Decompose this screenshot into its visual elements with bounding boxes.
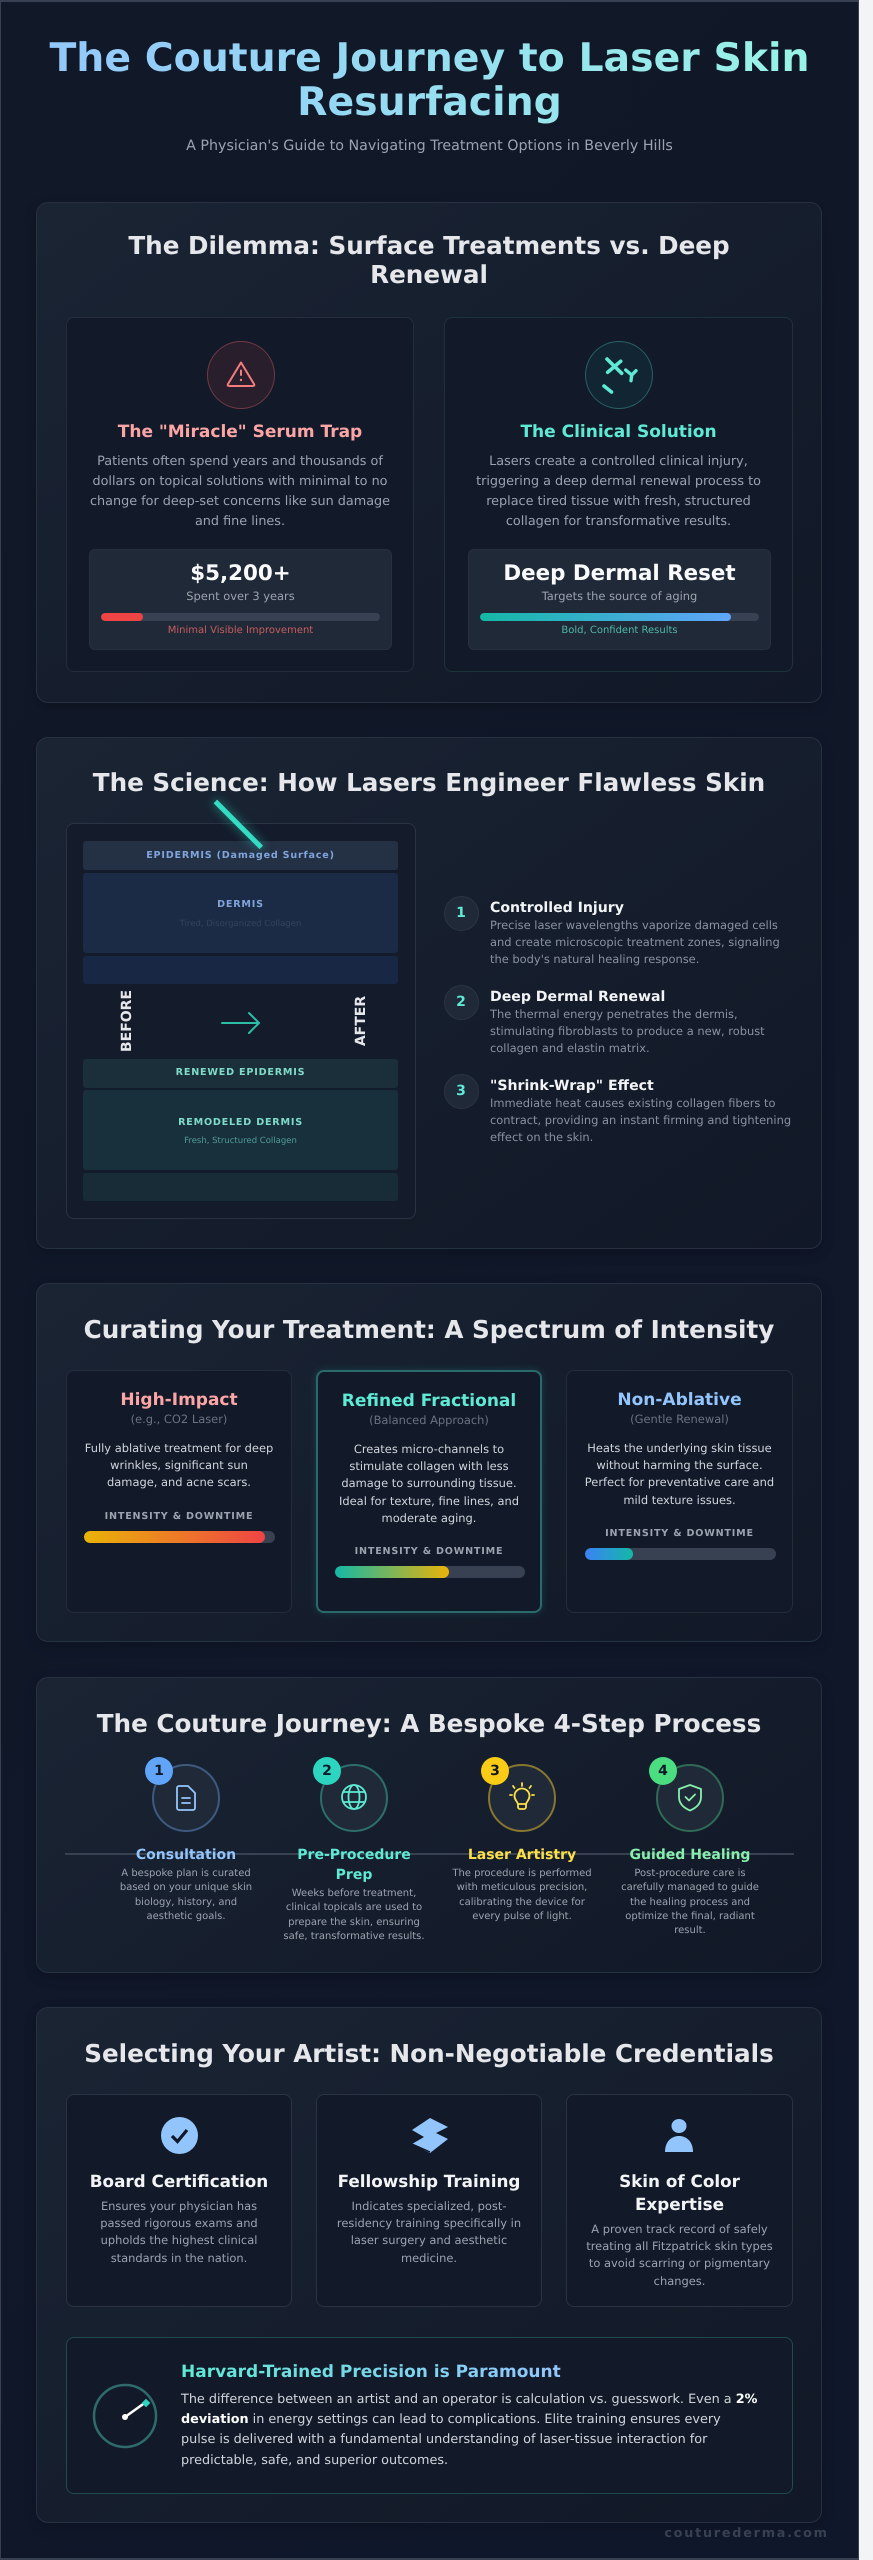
credential text xyxy=(100,2199,258,2265)
card: board certification xyxy=(66,2094,292,2307)
intensity meter xyxy=(334,1566,524,1578)
option subtitle: (Gentle Renewal) xyxy=(630,1412,729,1426)
icon: light bulb xyxy=(488,1764,556,1832)
credential text: medicine. xyxy=(401,2251,457,2265)
option text: Creates micro-channels to xyxy=(354,1442,504,1456)
meter label: INTENSITY & DOWNTIME xyxy=(105,1511,253,1522)
icon: precision gauge xyxy=(92,2384,158,2448)
step text: carefully managed to guide xyxy=(621,1882,759,1893)
step text: clinical topicals are used to xyxy=(286,1902,422,1913)
icon: globe xyxy=(320,1764,388,1832)
step: guided healing xyxy=(621,1757,759,1936)
card text: triggering a deep dermal renewal process to xyxy=(476,474,761,489)
callout title: Harvard-Trained Precision is Paramount xyxy=(181,2362,561,2382)
step text: Weeks before treatment, xyxy=(292,1888,416,1899)
card text: Lasers create a controlled clinical injury, xyxy=(489,454,748,469)
step number xyxy=(444,1074,478,1109)
card: fellowship xyxy=(316,2094,542,2307)
credential text: laser surgery and aesthetic xyxy=(351,2233,507,2247)
icon: check badge xyxy=(161,2117,198,2154)
step number xyxy=(444,985,478,1020)
step text: every pulse of light. xyxy=(472,1911,572,1922)
step badge xyxy=(649,1757,677,1785)
step text: based on your unique skin xyxy=(120,1882,252,1893)
credential text: treating all Fitzpatrick skin types xyxy=(586,2239,773,2253)
icon: document xyxy=(152,1764,220,1832)
icon: person xyxy=(665,2119,693,2152)
step text: The thermal energy penetrates the dermis, xyxy=(490,1006,738,1020)
step badge xyxy=(145,1757,173,1785)
step text: the body's natural healing response. xyxy=(490,952,699,966)
step title: Consultation xyxy=(136,1846,236,1862)
step text: aesthetic goals. xyxy=(146,1911,226,1922)
timeline line xyxy=(65,1853,794,1855)
watermark: couturederma.com xyxy=(664,2526,829,2541)
step badge: 2 xyxy=(322,1763,332,1779)
card text: collagen for transformative results. xyxy=(506,514,731,529)
credential title: Expertise xyxy=(635,2194,724,2214)
step text: with meticulous precision, xyxy=(457,1882,587,1893)
stat caption: Spent over 3 years xyxy=(186,589,295,603)
credential text: passed rigorous exams and xyxy=(100,2216,258,2230)
step: laser artistry xyxy=(452,1757,592,1922)
card: serum trap xyxy=(66,317,414,672)
heading: science: The Science: How Lasers Engineer Flawless Skin xyxy=(93,768,765,796)
step: pre-procedure xyxy=(283,1757,425,1942)
option text: moderate aging. xyxy=(382,1511,476,1525)
step text: Post-procedure care is xyxy=(634,1868,746,1879)
step 1 xyxy=(444,896,780,966)
callout text: deviation in energy settings can lead to complications. Elite training ensures every xyxy=(181,2412,721,2427)
label: dermis: DERMIS xyxy=(217,899,264,910)
option title: Refined Fractional xyxy=(342,1390,516,1410)
card: non-ablative xyxy=(566,1370,793,1613)
heading: dilemma: Renewal xyxy=(370,260,488,289)
credential text: upholds the highest clinical xyxy=(101,2233,257,2247)
step number: 3 xyxy=(456,1083,466,1099)
card text: dollars on topical solutions with minimal to no xyxy=(92,474,388,489)
step text: The procedure is performed xyxy=(452,1868,592,1879)
bar: bold results xyxy=(480,613,759,621)
step title xyxy=(297,1846,411,1882)
option subtitle: (e.g., CO2 Laser) xyxy=(131,1412,227,1426)
panel: dilemma xyxy=(36,202,822,703)
heading: journey: The Couture Journey: A Bespoke 4-Step Process xyxy=(97,1708,761,1738)
layer: epidermis before xyxy=(83,841,398,870)
option text: Ideal for texture, fine lines, and xyxy=(339,1494,519,1508)
bar caption: Bold, Confident Results xyxy=(561,625,678,636)
stat caption: Targets the source of aging xyxy=(542,589,697,603)
step text: Immediate heat causes existing collagen fibers to xyxy=(490,1096,776,1110)
stat box xyxy=(89,549,392,650)
option text: damage, and acne scars. xyxy=(107,1475,251,1489)
option text: wrinkles, significant sun xyxy=(110,1458,248,1472)
card text: replace tired tissue with fresh, structured xyxy=(486,494,751,509)
step title: Laser Artistry xyxy=(468,1846,576,1862)
option text xyxy=(339,1442,519,1525)
layer: subcutis after xyxy=(83,1173,398,1201)
step 2 xyxy=(444,985,765,1055)
credential text: A proven track record of safely xyxy=(591,2222,768,2236)
option title: High-Impact xyxy=(120,1390,238,1410)
card title: The "Miracle" Serum Trap xyxy=(118,422,362,442)
credential title xyxy=(619,2170,740,2214)
label: tired collagen: Tired, Disorganized Collagen xyxy=(180,919,301,929)
step badge: 3 xyxy=(490,1763,500,1779)
step number: 1 xyxy=(456,905,466,921)
card text xyxy=(476,454,761,529)
option text: stimulate collagen with less xyxy=(349,1459,509,1473)
diagram panel xyxy=(66,823,416,1219)
step title: Pre-Procedure xyxy=(297,1846,411,1862)
step text: Precise laser wavelengths vaporize damaged cells xyxy=(490,918,778,932)
step text xyxy=(452,1868,592,1922)
layer: epidermis after xyxy=(83,1059,398,1088)
bar caption: Minimal Visible Improvement xyxy=(168,625,313,636)
step title: Controlled Injury xyxy=(490,900,624,916)
step text: stimulating fibroblasts to produce a new, robust xyxy=(490,1024,765,1038)
callout text xyxy=(180,2392,758,2468)
label: before: BEFORE xyxy=(118,990,134,1052)
step text: calibrating the device for xyxy=(459,1897,585,1908)
option text xyxy=(85,1441,273,1489)
panel: science xyxy=(36,737,822,1249)
option text: without harming the surface. xyxy=(596,1458,763,1472)
label: remodeled dermis: REMODELED DERMIS xyxy=(178,1117,303,1128)
step: consultation xyxy=(120,1757,252,1922)
step text: collagen and elastin matrix. xyxy=(490,1041,650,1055)
credential title: Fellowship Training xyxy=(338,2170,520,2190)
card text xyxy=(90,454,390,529)
bar: minimal improvement xyxy=(101,613,380,621)
step text xyxy=(120,1868,252,1922)
credential text: to avoid scarring or pigmentary xyxy=(589,2256,770,2270)
step title: Guided Healing xyxy=(630,1846,750,1862)
step text: the healing process and xyxy=(630,1897,750,1908)
step text xyxy=(490,1006,765,1055)
step title: Prep xyxy=(336,1866,372,1882)
meter label: INTENSITY & DOWNTIME xyxy=(355,1546,503,1557)
heading: dilemma xyxy=(128,231,730,289)
callout text: predictable, safe, and superior outcomes. xyxy=(181,2453,448,2468)
option text: Heats the underlying skin tissue xyxy=(587,1441,772,1455)
option text: Perfect for preventative care and xyxy=(585,1475,774,1489)
heading: dilemma: The Dilemma: Surface Treatments vs. Deep xyxy=(128,231,730,260)
label: epidermis: EPIDERMIS (Damaged Surface) xyxy=(146,850,335,861)
panel: journey xyxy=(36,1677,822,1973)
card text: change for deep-set concerns like sun damage xyxy=(90,494,390,509)
step text: result. xyxy=(674,1925,706,1936)
icon: dna fragments xyxy=(585,341,653,409)
credential text: residency training specifically in xyxy=(337,2216,521,2230)
option text: Fully ablative treatment for deep xyxy=(85,1441,273,1455)
card: high-impact xyxy=(66,1370,292,1613)
laser beam xyxy=(214,799,263,848)
intensity meter xyxy=(585,1548,776,1560)
stat value: Deep Dermal Reset xyxy=(503,561,736,586)
step text xyxy=(490,1096,791,1144)
title: Resurfacing xyxy=(297,78,562,124)
credential title: Skin of Color xyxy=(619,2170,740,2190)
label: renewed epidermis: RENEWED EPIDERMIS xyxy=(176,1067,305,1078)
icon: shield xyxy=(656,1764,724,1832)
heading: credentials: Selecting Your Artist: Non-Negotiable Credentials xyxy=(84,2038,774,2068)
option text xyxy=(585,1441,774,1507)
credential title: Board Certification xyxy=(90,2170,268,2190)
layer: subcutis before xyxy=(83,956,398,984)
credential text xyxy=(337,2199,521,2265)
step 3 xyxy=(444,1074,791,1144)
subtitle: A Physician's Guide to Navigating Treatment Options in Beverly Hills xyxy=(186,138,673,154)
card text: Patients often spend years and thousands of xyxy=(97,454,383,469)
callout text: pulse is delivered with a fundamental understanding of laser-tissue interaction for xyxy=(181,2432,707,2447)
option text: mild texture issues. xyxy=(623,1493,736,1507)
panel: spectrum xyxy=(36,1283,822,1642)
option title: Non-Ablative xyxy=(617,1390,742,1410)
card text: and fine lines. xyxy=(195,514,285,529)
step badge: 1 xyxy=(154,1763,164,1779)
step text: optimize the final, radiant xyxy=(625,1911,755,1922)
card title: The Clinical Solution xyxy=(520,422,717,442)
step text: prepare the skin, ensuring xyxy=(288,1917,420,1928)
step badge xyxy=(481,1757,509,1785)
credential text: Ensures your physician has xyxy=(101,2199,257,2213)
credential text: standards in the nation. xyxy=(111,2251,247,2265)
intensity meter xyxy=(84,1531,275,1543)
step text: A bespoke plan is curated xyxy=(121,1868,251,1879)
step text: contract, providing an instant firming and tightening xyxy=(490,1113,791,1127)
step title: "Shrink-Wrap" Effect xyxy=(490,1078,654,1094)
stat box xyxy=(468,549,771,650)
option subtitle: (Balanced Approach) xyxy=(369,1413,489,1427)
step badge: 4 xyxy=(658,1763,668,1779)
step badge xyxy=(313,1757,341,1785)
layer: dermis before xyxy=(83,873,398,953)
label: after: AFTER xyxy=(353,996,369,1046)
stat value: $5,200+ xyxy=(190,561,291,586)
step text xyxy=(621,1868,759,1936)
credential text: Indicates specialized, post- xyxy=(352,2199,506,2213)
step text: effect on the skin. xyxy=(490,1130,593,1144)
step title: Deep Dermal Renewal xyxy=(490,988,665,1004)
title xyxy=(0,37,859,124)
credential text xyxy=(586,2222,773,2288)
step number: 2 xyxy=(456,994,466,1010)
step text: safe, transformative results. xyxy=(283,1931,425,1942)
arrow xyxy=(221,1012,260,1034)
meter label: INTENSITY & DOWNTIME xyxy=(605,1528,754,1539)
title: The Couture Journey to Laser Skin xyxy=(49,35,810,81)
layer: dermis after xyxy=(83,1090,398,1170)
heading: spectrum: Curating Your Treatment: A Spectrum of Intensity xyxy=(84,1314,774,1344)
option text: damage to surrounding tissue. xyxy=(341,1476,517,1490)
credential text: changes. xyxy=(654,2274,705,2288)
card: skin of color xyxy=(566,2094,793,2307)
step number xyxy=(444,896,478,931)
step text: and create microscopic treatment zones, signaling xyxy=(490,935,780,949)
icon: layers xyxy=(412,2118,448,2153)
card: refined fractional xyxy=(316,1370,542,1613)
step text xyxy=(283,1888,425,1942)
icon: warning triangle xyxy=(207,341,275,409)
callout: harvard precision xyxy=(66,2337,793,2494)
panel: credentials xyxy=(36,2007,822,2523)
step text: biology, history, and xyxy=(135,1897,237,1908)
card: clinical solution xyxy=(444,317,793,672)
label: fresh collagen: Fresh, Structured Collagen xyxy=(184,1136,297,1146)
step text xyxy=(490,918,780,966)
callout text: The difference between an artist and an operator is calculation vs. guesswork. Even a 2% xyxy=(181,2392,757,2407)
